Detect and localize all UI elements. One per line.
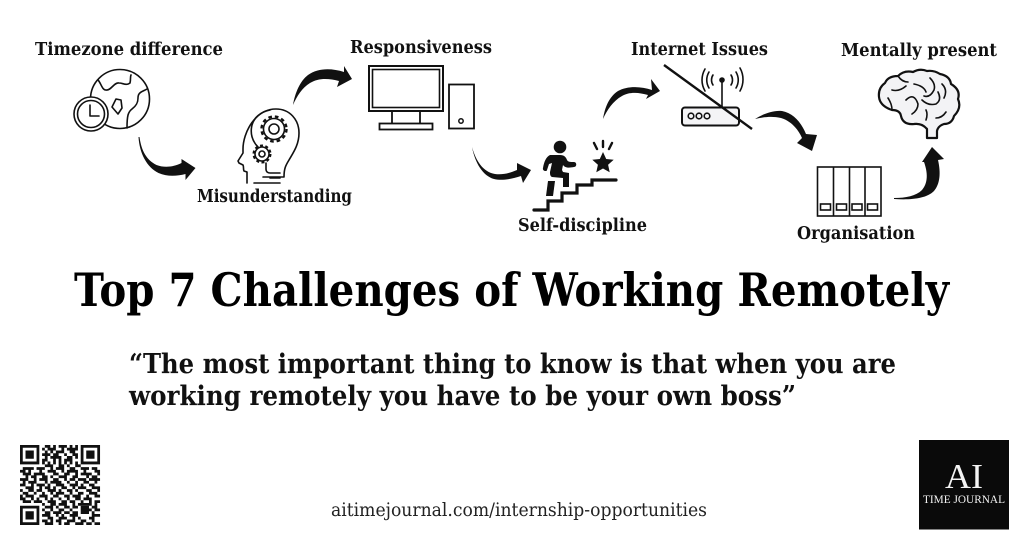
quote: working remotely you have to be your own boss”: [128, 381, 796, 412]
icon: person climbing stairs toward star: [534, 141, 616, 210]
arrow: stairs to router: [603, 79, 660, 119]
icon: head with gears: [238, 109, 299, 183]
QR code: [20, 446, 100, 524]
logo: AI Time Journal: AI: [945, 457, 983, 496]
arrow: head to computer: [293, 66, 352, 105]
arrow: router to binders: [755, 111, 817, 151]
icon: globe with clock: [74, 70, 150, 131]
quote: [128, 349, 896, 412]
label: Timezone difference: Timezone difference: [35, 40, 223, 60]
label: Misunderstanding: Misunderstanding: [197, 187, 352, 207]
arrow: globe to head: [138, 137, 196, 180]
label: Self-discipline: Self-discipline: [518, 216, 647, 236]
label: Responsiveness: Responsiveness: [350, 38, 492, 58]
label: Organisation: Organisation: [797, 224, 915, 244]
icon: binders: [818, 167, 881, 216]
label: Mentally present: Mentally present: [841, 41, 997, 61]
icon: desktop computer: [369, 66, 474, 130]
logo: AI Time Journal: TIME JOURNAL: [923, 492, 1005, 506]
logo: AI Time Journal: [919, 440, 1009, 530]
icon: brain: [879, 70, 959, 138]
quote: “The most important thing to know is that when you are: [129, 349, 896, 380]
label: Internet Issues: Internet Issues: [631, 40, 768, 60]
arrow: computer to stairs: [472, 147, 531, 183]
icon: router crossed out: [664, 65, 752, 129]
arrow: binders to brain: [894, 147, 944, 199]
website URL: aitimejournal.com/internship-opportunities: [331, 500, 707, 521]
